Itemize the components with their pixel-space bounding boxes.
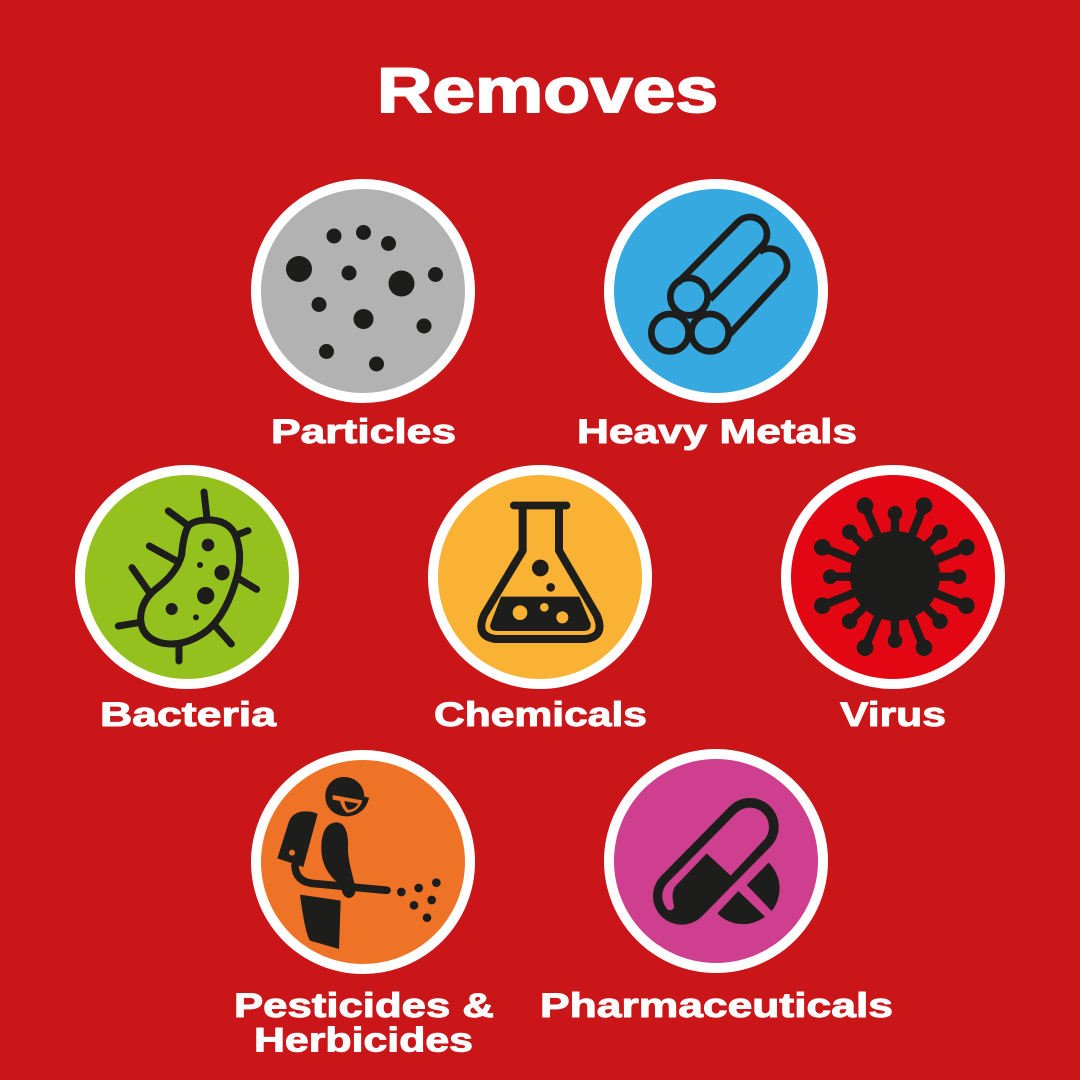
panel: pharmaceuticals [540,749,893,1025]
icon: flask [481,502,600,639]
label: pesticides and herbicides: Pesticides & [234,987,494,1025]
icon: person spraying [277,777,441,949]
icon: bacterium [118,492,257,661]
label: chemicals: Chemicals [434,696,647,734]
label: bacteria: Bacteria [100,696,277,734]
icon: capsule and tablet [662,808,780,924]
icon: particles [286,225,443,372]
panel: chemicals [428,465,652,734]
panel: pesticides and herbicides [234,750,494,1060]
icon: metal pipes [651,217,787,351]
title: Removes [377,56,718,126]
label: particles: Particles [271,413,456,451]
label: virus: Virus [840,696,946,734]
label: pesticides and herbicides: Herbicides [254,1022,473,1060]
icon: virus [814,497,975,656]
panel: virus [781,465,1005,734]
label: heavy metals: Heavy Metals [577,413,857,451]
panel: bacteria [75,465,299,734]
panel: heavy metals [577,179,857,451]
panel: particles [251,179,475,451]
label: pesticides and herbicides [234,987,494,1060]
label: pharmaceuticals: Pharmaceuticals [540,987,893,1025]
